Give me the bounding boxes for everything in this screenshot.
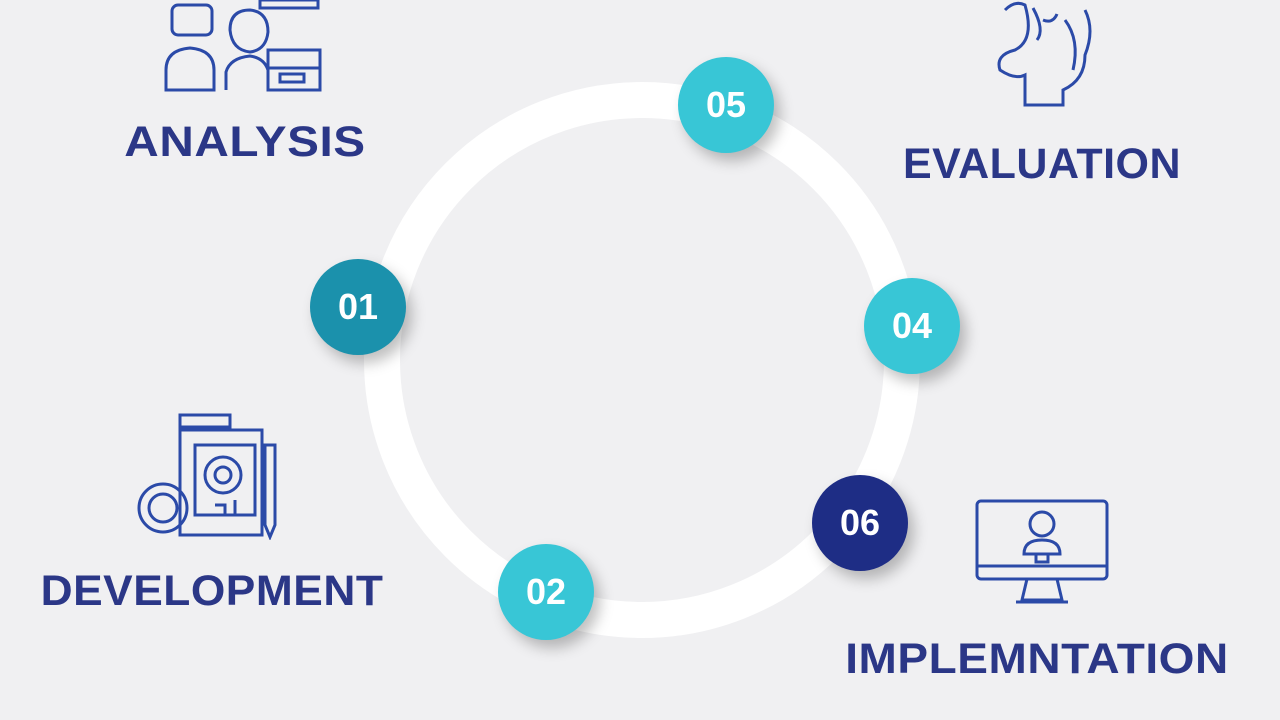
heading: implementation: IMPLEMNTATION bbox=[845, 635, 1229, 683]
icon: implementation monitor bbox=[976, 500, 1108, 604]
badge 05 bbox=[678, 57, 774, 153]
badge 06 bbox=[812, 475, 908, 571]
heading: development: DEVELOPMENT bbox=[41, 567, 383, 615]
heading: evaluation: EVALUATION bbox=[903, 140, 1181, 188]
heading: analysis: ANALYSIS bbox=[124, 118, 366, 166]
icon: development bbox=[138, 414, 276, 540]
badge 02: 02 bbox=[526, 571, 566, 612]
badge 04: 04 bbox=[892, 305, 932, 346]
badge 02 bbox=[498, 544, 594, 640]
badge 05: 05 bbox=[706, 84, 746, 125]
badge 04 bbox=[864, 278, 960, 374]
icon: evaluation head bbox=[998, 2, 1092, 106]
badge 01: 01 bbox=[338, 286, 378, 327]
badge 06: 06 bbox=[840, 502, 880, 543]
icon: analysis people bbox=[164, 0, 322, 92]
badge 01 bbox=[310, 259, 406, 355]
